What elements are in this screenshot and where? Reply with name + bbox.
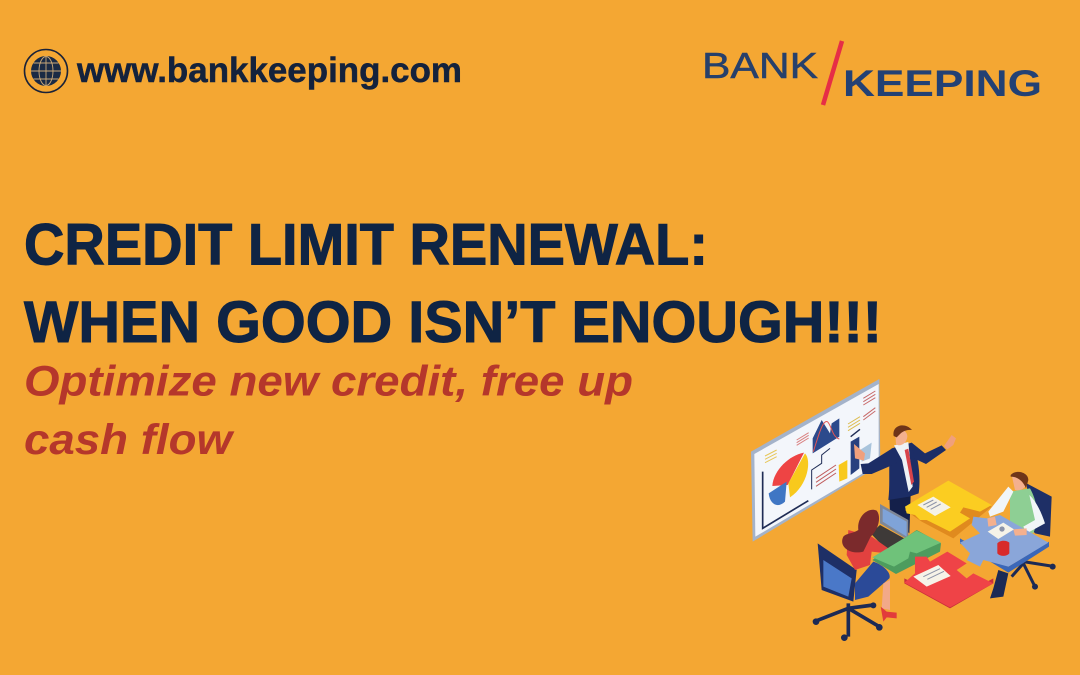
blue office chair xyxy=(813,543,883,641)
subtitle: cash flow xyxy=(24,416,235,464)
logo: Bank Keeping: KEEPING xyxy=(843,63,1042,104)
website url: www.bankkeeping.com xyxy=(76,51,462,90)
whiteboard chart panel xyxy=(751,379,880,542)
logo: Bank Keeping xyxy=(702,41,1042,105)
yellow puzzle piece xyxy=(905,481,992,538)
title: CREDIT LIMIT RENEWAL: xyxy=(24,212,708,278)
title: WHEN GOOD ISN’T ENOUGH!!! xyxy=(24,290,882,355)
blue puzzle table xyxy=(960,515,1056,598)
illustration: business team meeting xyxy=(751,379,1056,641)
presenter man xyxy=(854,425,956,533)
title xyxy=(24,212,882,355)
subtitle xyxy=(24,358,633,464)
logo: Bank Keeping: BANK xyxy=(702,45,818,86)
green puzzle piece xyxy=(872,530,941,574)
seated man xyxy=(988,472,1052,537)
icon: globe xyxy=(24,50,68,92)
red puzzle piece xyxy=(904,552,993,608)
subtitle: Optimize new credit, free up xyxy=(24,358,633,406)
woman with laptop xyxy=(842,504,908,622)
